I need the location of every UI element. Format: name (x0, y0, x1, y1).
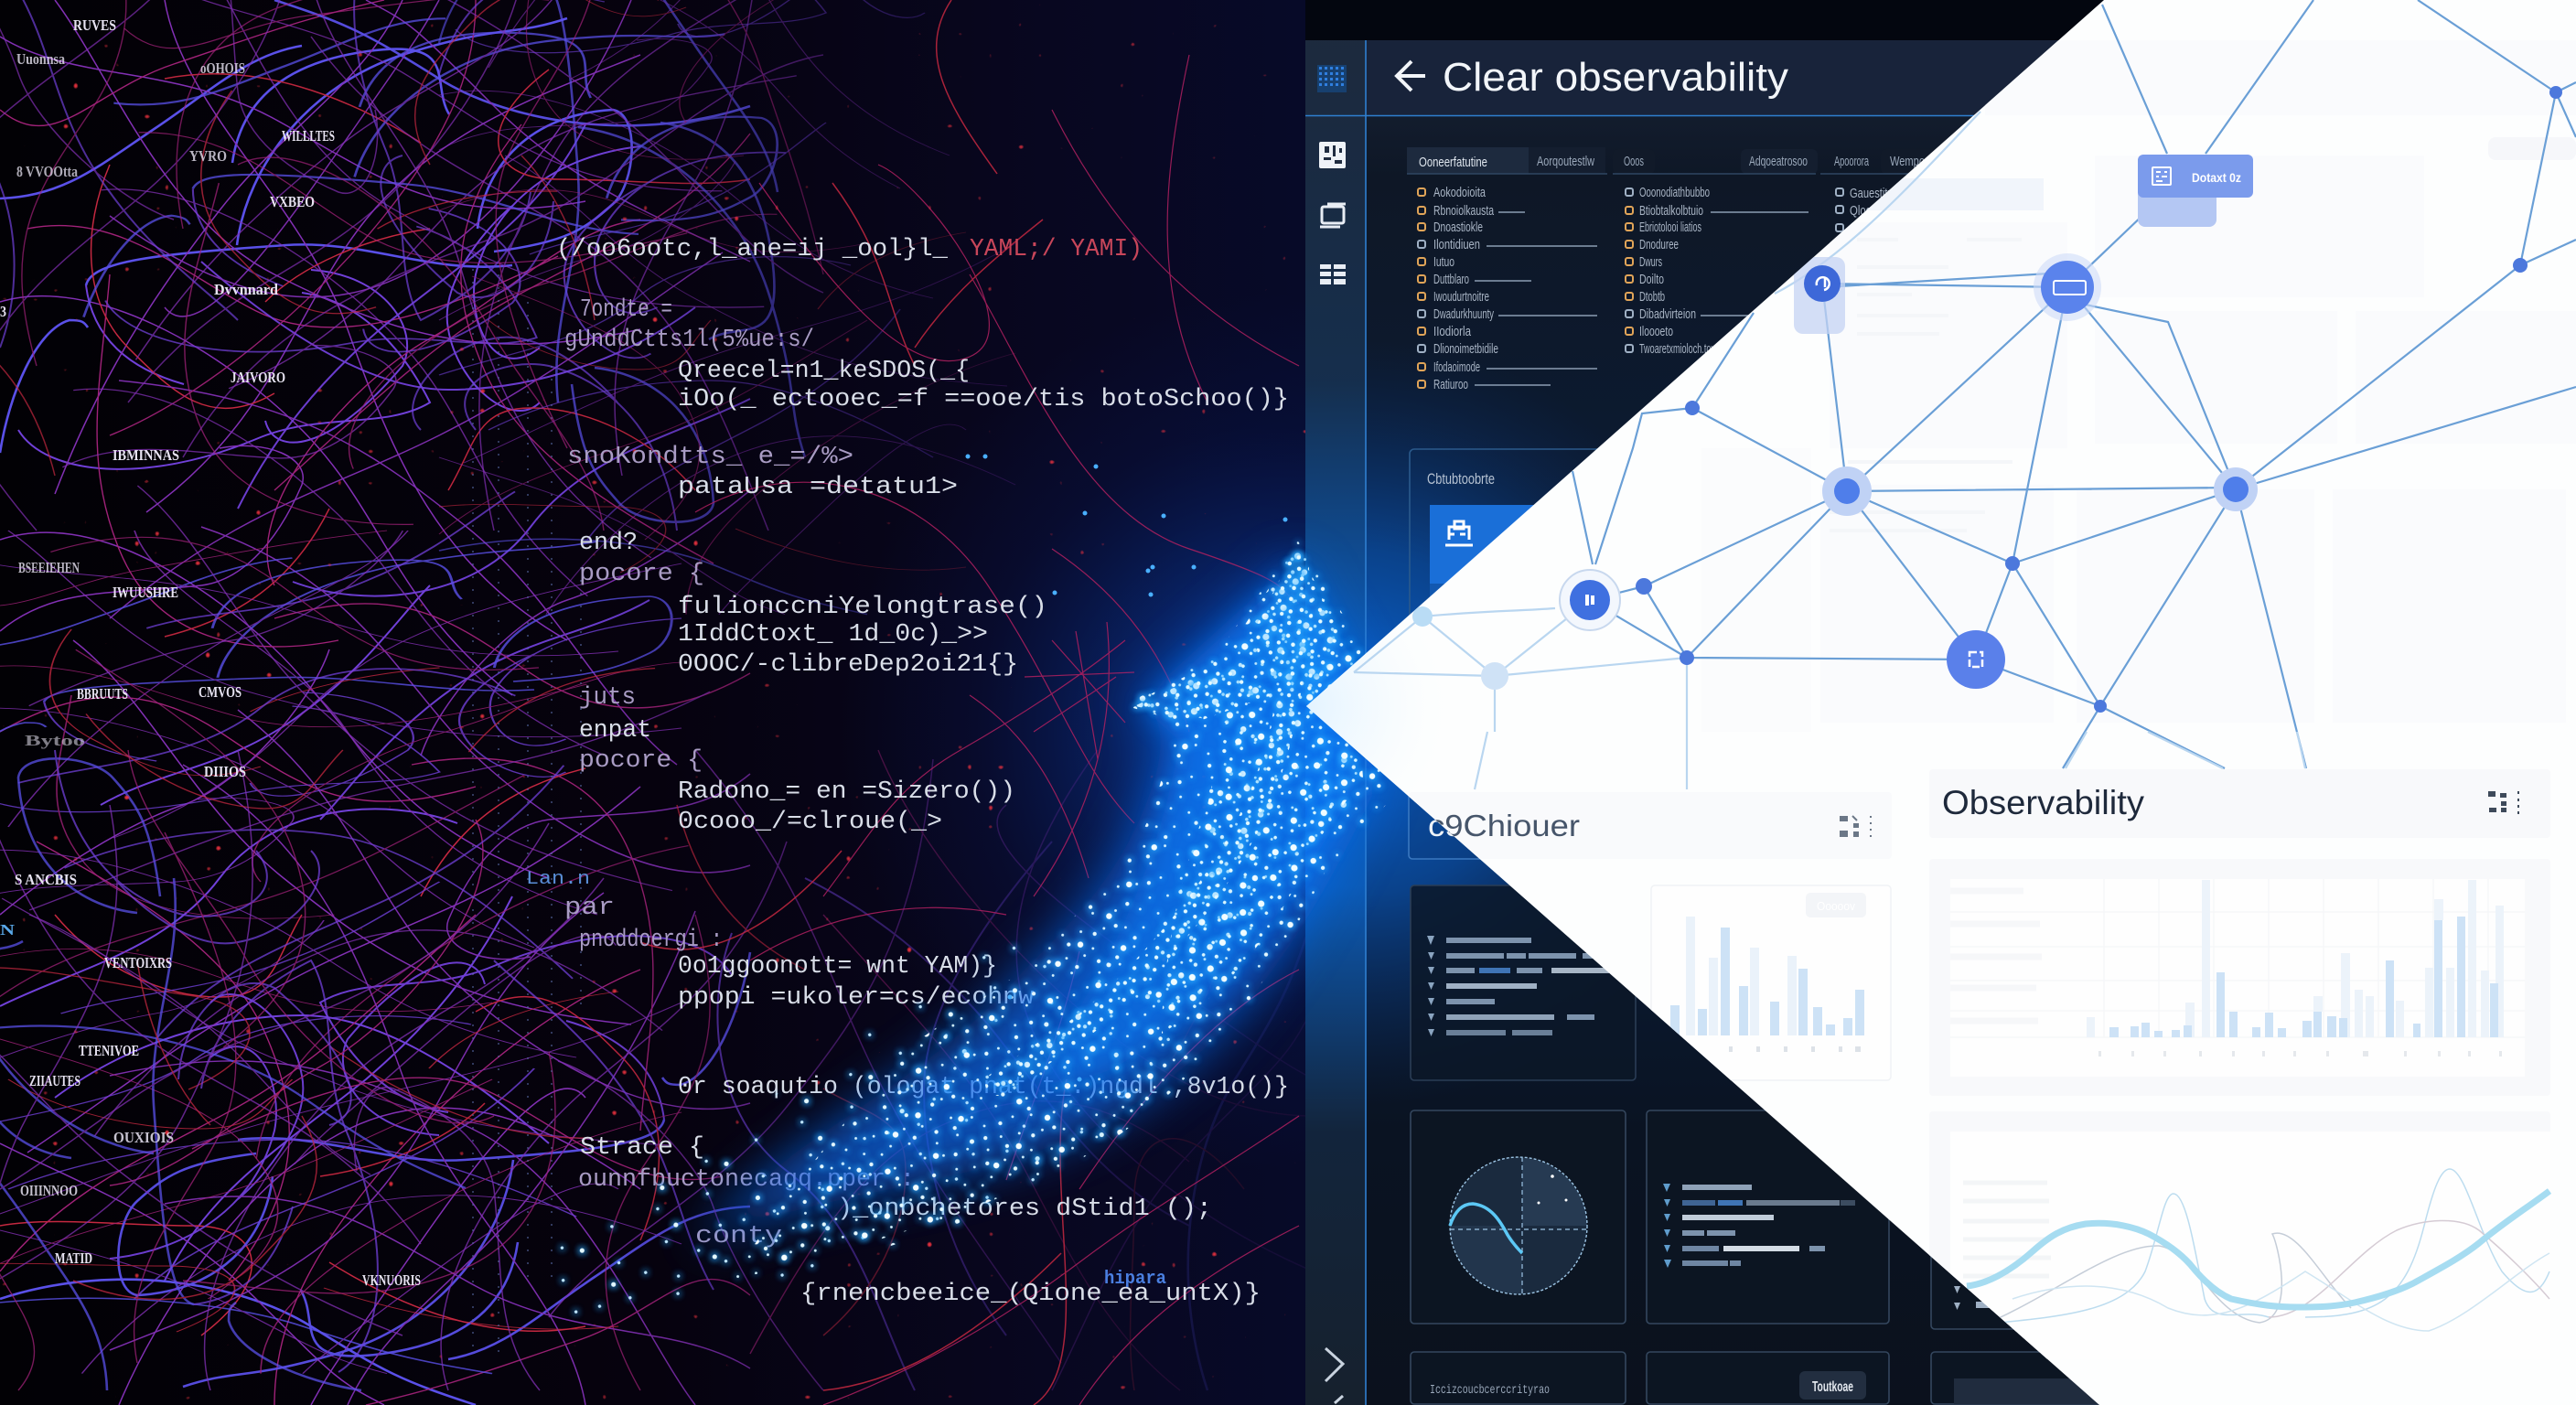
code block: par (564, 895, 615, 922)
code block: enpat (579, 717, 651, 745)
node: large square icon (1947, 630, 2005, 689)
list column 1: Ilontidiuen (1433, 237, 1480, 252)
list column 1: Aokodoioita (1433, 185, 1486, 200)
node: small (1685, 401, 1700, 415)
node: small (1636, 578, 1652, 595)
list column 2: Doilto (1639, 272, 1664, 287)
thin curve: pale blue low (2012, 1253, 2549, 1331)
card: Observability header: Observability (1942, 784, 2145, 821)
background glow behind arrow (0, 0, 1308, 1405)
tangled wires (0, 0, 1314, 1405)
code block: 0cooo_/=clroue(_> (678, 809, 942, 836)
tabs row: Adqoeatrosoo (1749, 154, 1808, 169)
code block: hipara (1104, 1269, 1166, 1290)
scattered wire labels: BSEEIEHEN (18, 559, 80, 576)
dashboard panel: dark side (1305, 40, 2576, 1405)
arrow far sparse particles (531, 933, 1217, 1335)
card: Chiouer header light (1409, 796, 1872, 859)
line chart card (1929, 1168, 2551, 1359)
sidebar icon: window (1320, 204, 1346, 227)
scattered wire labels: BBRUUTS (77, 685, 128, 702)
thin curve: pink grey (2269, 1220, 2549, 1317)
card: Chiouer header light: c9Chiouer (1428, 809, 1580, 842)
list column 2: Iloooeto (1639, 324, 1673, 339)
code block: pocore { (579, 747, 703, 775)
code block: Lan.n (526, 869, 590, 890)
main curve (1967, 1191, 2549, 1307)
tabs row (1407, 147, 1954, 174)
list column 2: Dwurs (1639, 254, 1662, 270)
list column 1: Dlionoimetbidile (1433, 341, 1498, 357)
list column 1: Ifodaoimode (1433, 359, 1480, 375)
label chip (2138, 155, 2253, 227)
arrow tip particles (1253, 545, 1343, 695)
list column 1: Dwadurkhuunty (1433, 306, 1494, 322)
bottom card with inset (1931, 1352, 2141, 1404)
list column 1: Dnoastiokle (1433, 220, 1483, 235)
scattered wire labels: Uuonnsa (16, 50, 65, 68)
panel background (1305, 40, 2576, 1405)
list column 1: Rbnoiolkausta (1433, 203, 1494, 219)
thin curve: light blue (2004, 1193, 2269, 1323)
icon: card menu (1841, 816, 1871, 837)
node: hub left (1822, 467, 1872, 516)
bar chart card (small): Ooooov (1817, 899, 1855, 913)
node: window (2034, 253, 2101, 321)
card: Observability header (1943, 789, 2519, 821)
code block: Strace { (580, 1134, 704, 1162)
code block (526, 236, 1289, 1308)
code block: Radono_= en =Sizero()) (678, 778, 1015, 806)
list column 2: Btiobtalkolbtuio (1639, 203, 1703, 219)
sidebar chevron right (1326, 1348, 1343, 1381)
scattered wire labels: VENTOIXRS (104, 954, 172, 971)
node: small (2094, 700, 2107, 713)
icon: header menu (2489, 791, 2518, 814)
arrow left barb particles (1127, 660, 1272, 724)
list column 1: Duttblaro (1433, 272, 1469, 287)
node: small far right (2513, 258, 2528, 273)
scattered wire labels: ZIIAUTES (29, 1072, 80, 1089)
icon: chip glyph (2152, 167, 2171, 185)
code block: {rnencbeeice_(Qione_ea_untX)} (800, 1281, 1261, 1308)
node: small top right (2549, 86, 2562, 99)
node: hub right (2214, 467, 2258, 511)
scattered wire labels: TTENIVOE (79, 1042, 139, 1059)
arrow dense head particles (1134, 545, 1363, 1034)
pale tile behind node (1794, 257, 1845, 334)
code block: )_onbchetores dStid1 (); (837, 1196, 1212, 1223)
list column 2: Dibadvirteion (1639, 306, 1696, 322)
scattered wire labels: WILLLTES (282, 127, 335, 145)
tabs row: Apoorora (1834, 154, 1869, 169)
third dark card (1931, 1110, 2141, 1329)
scattered wire labels: 3 (0, 303, 6, 320)
code block: 0OOC/-clibreDep2oi21{} (678, 651, 1018, 679)
tabs row: Aorqoutestlw (1537, 154, 1594, 169)
code block: pataUsa =detatu1> (678, 474, 958, 501)
code block: pnoddoergi : (579, 927, 723, 954)
apex glow (1306, 620, 1403, 792)
sidebar icon: list (1320, 264, 1346, 284)
code block: fulionccniYelongtrase() (678, 594, 1047, 621)
scattered wire labels (0, 16, 421, 1289)
arrow outer particles (732, 540, 1386, 1281)
node: server (1804, 265, 1841, 302)
list column 1: IIodiorla (1433, 324, 1471, 339)
network graph (1354, 0, 2576, 789)
scattered wire labels: IWUUSHRE (113, 584, 178, 601)
scattered wire labels: N (0, 921, 16, 938)
arrow wide glow (695, 558, 1372, 1244)
code block: 0o1ggoonott= wnt YAM)} (678, 953, 997, 981)
list column 1: Ratiuroo (1433, 377, 1468, 392)
pie (1450, 1157, 1587, 1294)
tabs row: Ooneerfatutine (1419, 155, 1487, 170)
code block: 0r soaqutio (ologat pnat(t_.)ngdl ,8v1o()} (678, 1074, 1289, 1101)
list column 2: Dtobtb (1639, 289, 1665, 305)
white observability side (1281, 0, 2576, 1405)
network edges (1354, 0, 2576, 789)
pale bars (2087, 880, 2504, 1037)
bottom card with caption (1411, 1352, 1626, 1404)
bar chart card (large) (1950, 879, 2525, 1056)
code block: Qreecel=n1_keSDOS(_{ (678, 358, 970, 385)
tabs row: Ooos (1624, 154, 1644, 169)
scattered wire labels: 8 VVOOtta (16, 163, 78, 180)
code block: pocore { (579, 561, 704, 588)
sidebar icon: app tile (1319, 142, 1346, 168)
red sparks (0, 0, 1308, 1405)
label chip: Dotaxt 0z (2192, 170, 2241, 185)
code block: end? (579, 530, 638, 557)
list column 2: Ooonodiathbubbo (1639, 185, 1710, 200)
scattered wire labels: VKNUORIS (362, 1271, 421, 1289)
list column 1: Iutuo (1433, 254, 1454, 270)
ghost panels (1830, 40, 2058, 243)
stray blue sparks (968, 456, 1285, 1079)
panel blue glow (1305, 40, 1946, 1405)
tabs row: Wempo (1890, 154, 1925, 169)
list column 2: Dnoduree (1639, 237, 1679, 252)
node: small (2005, 556, 2020, 571)
card: blue tile: Cbtubtoobrte (1427, 470, 1495, 488)
list column 3: Qloo (1850, 203, 1872, 219)
list column 3: Gauestitunn (1850, 186, 1905, 201)
scattered wire labels: oOHOIS (200, 59, 245, 77)
button (1806, 893, 1866, 917)
list column 1 (1418, 185, 1597, 392)
scattered wire labels: OUXIOIS (113, 1129, 174, 1146)
bar chart card (small) (1651, 885, 1891, 1080)
list column 1: Iwoudurtnoitre (1433, 289, 1489, 305)
scattered wire labels: JAIVORO (231, 369, 285, 386)
node: ringed thumb (1560, 570, 1620, 630)
card: Chiouer header dark (1409, 792, 1892, 859)
card: blue tile (1410, 449, 1867, 724)
pie card (1411, 1110, 1626, 1324)
scattered wire labels: MATID (55, 1249, 92, 1267)
code block: 7ondte = (580, 296, 672, 324)
list column 2 (1626, 185, 1809, 357)
code block: iOo(_ ectooec_=f ==ooe/tis botoSchoo()} (678, 386, 1289, 413)
strong bars (2109, 917, 2498, 1037)
sidebar (1305, 40, 1366, 1405)
scattered wire labels: RUVES (73, 16, 116, 34)
scattered wire labels: DIIIOS (204, 763, 246, 780)
back arrow (1397, 61, 1425, 91)
bottom card with button: Toutkoae (1812, 1379, 1853, 1395)
code block: (/oo6ootc,l_ane=ij _ool}l_ (556, 236, 949, 263)
code block: YAML;/ YAMI) (970, 236, 1143, 263)
background: dark chaos side (0, 0, 1308, 1405)
title: Clear observability (1443, 55, 1788, 100)
dashed vertical guides behind code (473, 256, 581, 1354)
white triangle background (1281, 0, 2576, 1405)
scattered wire labels: Dvvnnard (214, 281, 279, 298)
scattered wire labels: IBMINNAS (113, 446, 179, 464)
top band above dashboard (1305, 0, 2220, 40)
blue particle arrow (531, 456, 1386, 1335)
arrow core streak (997, 567, 1297, 1084)
mini list card (1411, 885, 1636, 1080)
code block: juts (579, 684, 636, 712)
scattered wire labels: S ANCBIS (15, 871, 77, 888)
scattered wire labels: CMVOS (199, 683, 242, 701)
node: pale (1412, 606, 1433, 627)
list column 2: Ebriotolooi liatios (1639, 220, 1701, 235)
code block: 1IddCtoxt_ 1d_0c)_>> (678, 621, 988, 649)
list column 3 (1836, 186, 1905, 231)
code block: ppopi =ukoler=cs/ecohnw (678, 984, 1034, 1012)
thin curve: grey (1976, 1233, 2351, 1328)
arrow tight glow (1034, 567, 1354, 1083)
code block: conty (695, 1223, 782, 1250)
bottom card with button (1647, 1352, 1889, 1404)
ghost text lines (1848, 460, 2012, 464)
node: pale (1481, 662, 1508, 690)
sidebar chevron left (1335, 1396, 1343, 1403)
list column 2: Twoaretxmioloch.tov (1639, 341, 1715, 357)
code block: ounnfbuctonecagq.pper : (578, 1166, 915, 1194)
code block: snoKondtts_ e_=/%> (567, 444, 853, 471)
icon: white app glyph (1445, 521, 1473, 545)
header bar (1366, 40, 2281, 115)
scattered wire labels: OIIINNOO (20, 1182, 78, 1199)
scattered wire labels: YVRO (189, 147, 227, 165)
dark list card (1647, 1110, 1889, 1324)
sidebar icon: blue grid (1317, 65, 1347, 92)
node: small (1680, 650, 1694, 665)
sparse red wires on the right of the chaos side (640, 0, 1299, 1405)
scattered wire labels: VXBEO (270, 193, 315, 210)
scattered wire labels: Bytoo (25, 732, 85, 749)
card: Chiouer header dark: c9Chiouer (1428, 809, 1580, 842)
code block: gUnddCtts1l(5%ue:s/ (564, 327, 814, 354)
bottom card with caption: Iccizcoucbcerccrityrao (1430, 1383, 1550, 1398)
